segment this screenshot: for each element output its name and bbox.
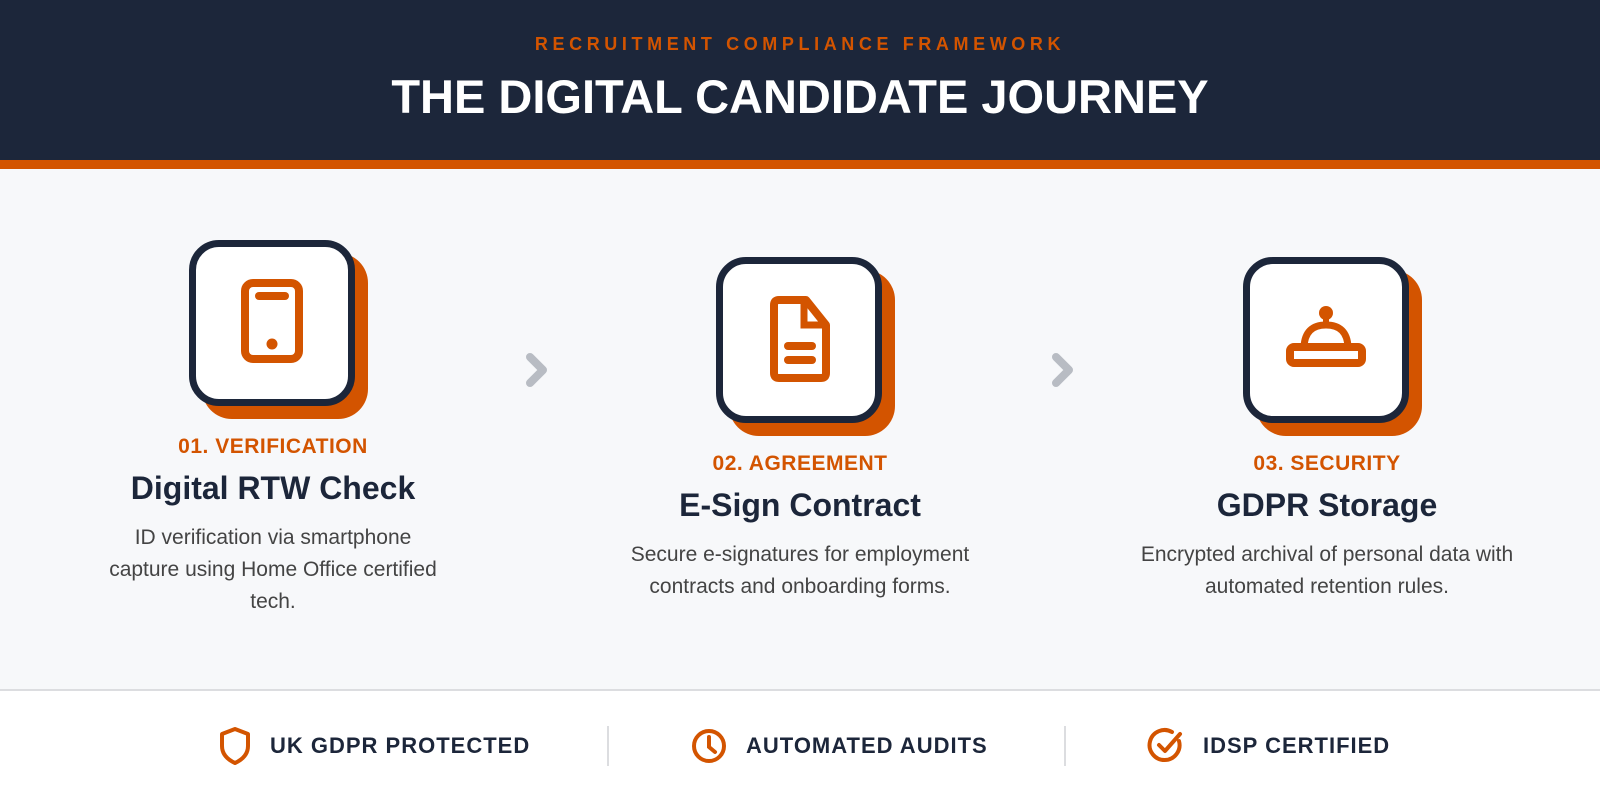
badge: IDSP [1148, 728, 1390, 762]
icon: shield [220, 727, 250, 765]
arrow 2 [1052, 353, 1073, 387]
step 2 text: Secure e-signatures for employment contracts and onboarding forms. [631, 543, 969, 598]
icon: check circle [1148, 728, 1182, 762]
step 2 box [716, 257, 882, 423]
step 3 heading: GDPR Storage [1217, 487, 1437, 523]
step 1 heading: Digital RTW Check [131, 470, 415, 506]
step 2 heading: E-Sign Contract [679, 487, 921, 523]
step 1 label: 01. VERIFICATION [178, 435, 368, 458]
badge: GDPR [220, 727, 530, 765]
badge: GDPR: UK GDPR PROTECTED [270, 733, 530, 758]
badge: audits [692, 729, 988, 763]
arrow 1 [526, 353, 547, 387]
step 3 text: Encrypted archival of personal data with automated retention rules. [1141, 543, 1513, 598]
step 2 label: 02. AGREEMENT [713, 452, 887, 475]
badge: audits: AUTOMATED AUDITS [746, 733, 988, 758]
title: THE DIGITAL CANDIDATE JOURNEY [391, 70, 1209, 123]
step 1 text: ID verification via smartphone capture using Home Office certified tech. [109, 526, 437, 613]
header [0, 0, 1600, 160]
icon: smartphone [241, 279, 303, 363]
icon: stamp [1286, 306, 1366, 367]
step 1 box [189, 240, 355, 406]
icon: document [770, 296, 830, 382]
subtitle: RECRUITMENT COMPLIANCE FRAMEWORK [535, 34, 1065, 54]
step 3 label: 03. SECURITY [1253, 452, 1401, 475]
icon: clock [692, 729, 726, 763]
step 3 box [1243, 257, 1409, 423]
badge: IDSP: IDSP CERTIFIED [1203, 733, 1390, 758]
